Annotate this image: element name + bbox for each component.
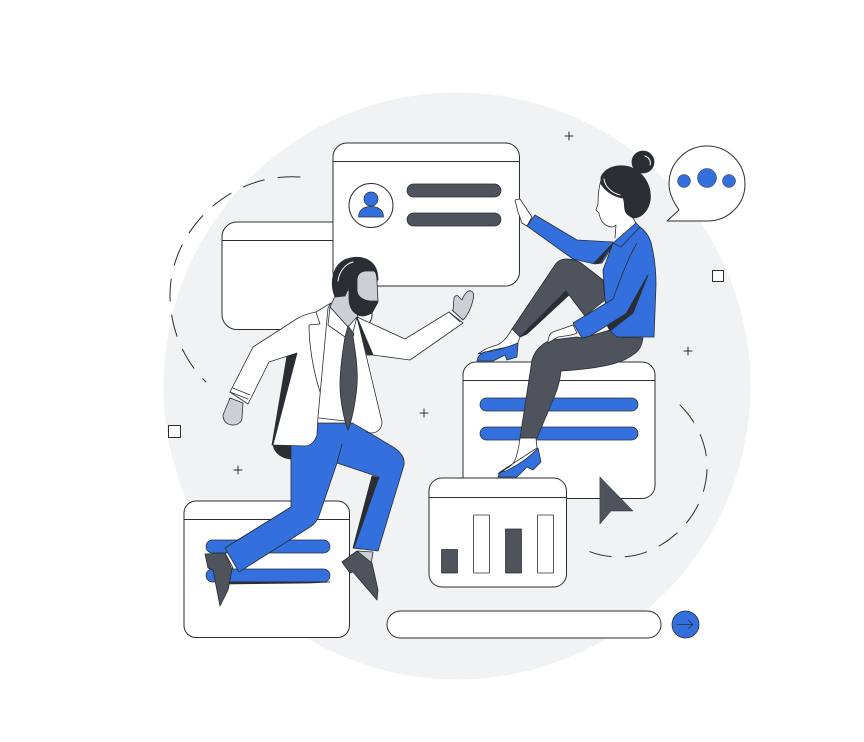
woman sleeve outline and seam bbox=[573, 243, 648, 338]
woman raised arm bbox=[527, 215, 613, 264]
man lapel and cuffs bbox=[230, 310, 463, 399]
man jacket right edge bbox=[357, 317, 382, 433]
woman leg shadow bbox=[520, 291, 569, 337]
man face bbox=[357, 271, 378, 301]
woman front foot bbox=[498, 438, 537, 474]
man shirt hem bbox=[318, 418, 353, 423]
profile card bbox=[333, 143, 520, 286]
dashed arc: right bbox=[588, 405, 707, 557]
man trousers bbox=[225, 423, 404, 572]
man arm shadow bbox=[357, 318, 373, 355]
woman face profile bbox=[596, 180, 636, 238]
woman hair highlights bbox=[604, 156, 650, 195]
man trouser crease bbox=[337, 444, 342, 463]
man shadows bbox=[225, 353, 380, 584]
decorative plus signs bbox=[234, 132, 692, 474]
woman back leg bbox=[512, 259, 605, 337]
woman back foot bbox=[478, 329, 520, 354]
bar chart card bbox=[429, 478, 566, 587]
decorative squares bbox=[168, 270, 724, 438]
lower left card with blue bars bbox=[184, 501, 350, 638]
woman hand on knee bbox=[548, 325, 577, 343]
figure: man running bbox=[205, 257, 474, 606]
man raised arm sleeve bbox=[357, 312, 463, 360]
woman collar bbox=[613, 223, 640, 247]
man collar bbox=[328, 307, 357, 337]
man shirt and inner jacket bbox=[318, 308, 382, 433]
woman hair bun bbox=[632, 151, 654, 173]
figure: seated woman bbox=[477, 151, 656, 477]
profile text bars bbox=[407, 184, 501, 226]
avatar icon bbox=[349, 184, 393, 228]
woman jacket shadow bbox=[594, 243, 648, 331]
woman hand on card bbox=[515, 199, 532, 226]
man necktie bbox=[340, 326, 357, 430]
woman back shoe bbox=[477, 343, 518, 361]
seat card with blue bars bbox=[463, 362, 655, 498]
man back hand bbox=[223, 398, 243, 425]
man beard bbox=[349, 285, 378, 316]
go button with arrow bbox=[672, 611, 699, 638]
woman hair bbox=[601, 166, 650, 218]
woman lower arm bbox=[573, 299, 627, 338]
woman face and neck bbox=[596, 178, 636, 243]
woman front leg bbox=[520, 330, 643, 438]
back window card bbox=[222, 222, 372, 330]
background circle bbox=[164, 92, 750, 680]
woman front shoe bbox=[498, 448, 541, 477]
man hair highlight bbox=[338, 262, 353, 281]
man socks bbox=[225, 551, 373, 570]
cursor arrow bbox=[600, 477, 633, 524]
man hair bbox=[332, 257, 378, 297]
man neck bbox=[330, 290, 358, 327]
speech bubble bbox=[667, 146, 745, 221]
dashed arc: left bbox=[170, 177, 300, 382]
woman jacket torso bbox=[603, 227, 656, 337]
man jacket left panel with sleeve bbox=[230, 303, 331, 446]
search bar bbox=[387, 611, 661, 638]
man shoes bbox=[205, 551, 378, 606]
man raised hand bbox=[453, 291, 474, 320]
